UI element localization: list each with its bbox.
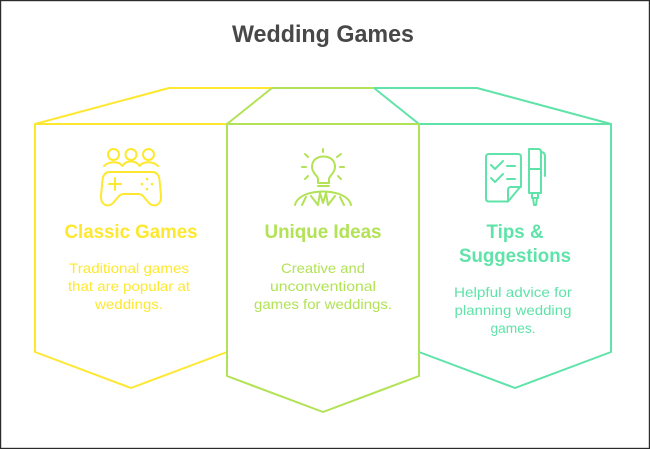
text: classic games description: that are popular at <box>68 278 190 294</box>
title: Wedding Games <box>232 21 414 48</box>
panel: tips and suggestions <box>374 88 611 388</box>
text: classic games description <box>68 260 190 312</box>
panel: unique ideas <box>227 88 419 412</box>
icon: person with light bulb <box>295 149 351 205</box>
text: tips description <box>454 284 572 336</box>
text: unique ideas description: games for weddings. <box>254 296 392 312</box>
heading: tips and suggestions <box>459 222 571 267</box>
shape: unique ideas outline <box>227 88 419 412</box>
text: unique ideas description: unconventional <box>270 278 376 294</box>
text: classic games description: weddings. <box>94 296 163 312</box>
heading: tips and suggestions: Suggestions <box>459 246 571 267</box>
icon: checklist and pen <box>486 149 545 205</box>
shape: classic games outline <box>35 88 272 388</box>
icon: game controller with people <box>101 149 161 205</box>
text: tips description: planning wedding <box>454 302 572 318</box>
text: classic games description: Traditional games <box>69 260 189 276</box>
shape: tips outline <box>374 88 611 388</box>
text: tips description: Helpful advice for <box>454 284 572 300</box>
heading: classic games: Classic Games <box>64 222 198 243</box>
heading: unique ideas: Unique Ideas <box>264 222 382 243</box>
heading: tips and suggestions: Tips & <box>486 222 544 243</box>
text: unique ideas description <box>254 260 392 312</box>
panel: classic games <box>35 88 272 388</box>
text: tips description: games. <box>490 320 536 336</box>
text: unique ideas description: Creative and <box>281 260 365 276</box>
